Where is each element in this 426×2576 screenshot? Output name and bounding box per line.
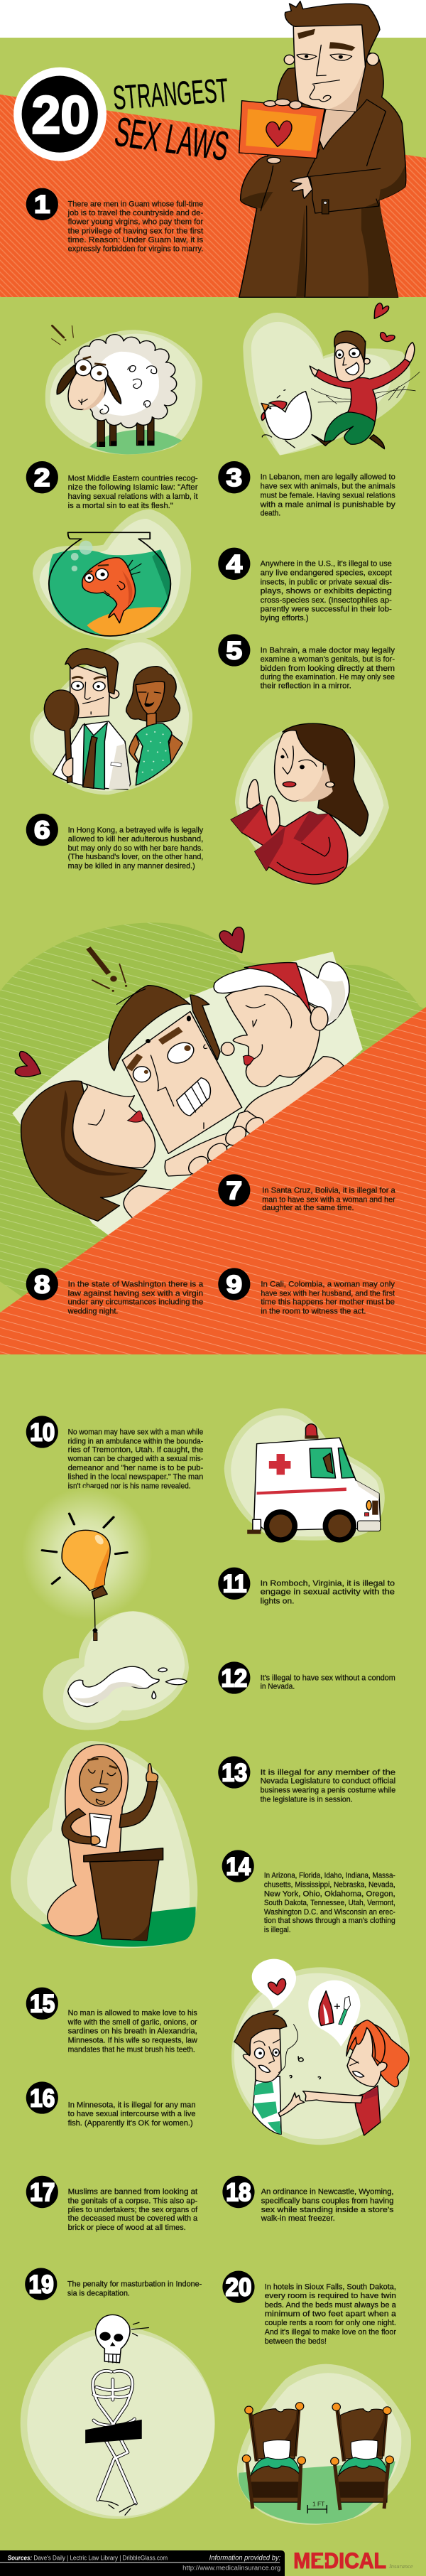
text: law 5: during the examination. He may only see xyxy=(261,672,395,681)
badge: 2: 2 xyxy=(34,464,50,492)
text: law 7: In Santa Cruz, Bolivia, it is illegal for a xyxy=(262,1185,395,1195)
illustration: angry wife xyxy=(231,723,389,884)
text: law 8: under any circumstances including the xyxy=(68,1297,204,1306)
text: law 1: the privilege of having sex for the first xyxy=(68,226,204,235)
text: law 15: wife with the smell of garlic, onions, or xyxy=(67,2017,197,2027)
censor bar xyxy=(85,2420,142,2443)
text: law 3: must be female. Having sexual relations xyxy=(261,490,395,500)
badge: 4 xyxy=(218,548,250,580)
badge: 5 xyxy=(218,634,250,667)
text: law 4: cross-species sex. (Insectophiles ap- xyxy=(261,596,392,605)
text: law 4: parently were successful in their lob- xyxy=(261,604,392,613)
badge: 13: 13 xyxy=(222,1759,247,1787)
badge: 11: 11 xyxy=(223,1570,246,1598)
text: law 4 xyxy=(261,559,392,623)
text: law 20: every room is required to have twin xyxy=(265,2292,396,2300)
badge: 15 xyxy=(26,1988,58,2020)
panel: laws 14 to 16 xyxy=(26,1850,410,2145)
text: law 13 xyxy=(261,1767,396,1804)
text: law 7: daughter at the same time. xyxy=(262,1203,354,1212)
panel: header: SEX LAWS xyxy=(111,109,232,170)
text: law 17: plies to undertakers; the sex organs of xyxy=(68,2206,198,2214)
text: law 8 xyxy=(67,1279,204,1315)
text: law 8: In the state of Washington there is a xyxy=(68,1279,204,1288)
text: law 11: lights on. xyxy=(261,1596,294,1605)
illustration: sheep xyxy=(45,330,202,454)
badge: 18: 18 xyxy=(226,2178,251,2206)
illustration: twin beds: 1 FT xyxy=(312,2501,324,2508)
icon: hearts above man xyxy=(374,303,395,342)
text: law 10: demeanor and "her name is to be pub- xyxy=(68,1463,203,1472)
panel: laws 2 to 4 xyxy=(26,303,420,640)
text: law 6: may be killed in any manner desired.) xyxy=(68,861,195,871)
badge: 7 xyxy=(218,1174,250,1207)
text: law 11: engage in sexual activity with the xyxy=(261,1587,395,1596)
text: law 10: riding in an ambulance within the bounda- xyxy=(68,1436,203,1445)
text: law 4: insects, in public or private sexual dis- xyxy=(261,577,392,586)
badge: 3: 3 xyxy=(226,464,242,492)
background: striped green heart xyxy=(0,922,426,1327)
text: law 18 xyxy=(261,2188,394,2223)
text: law 2 xyxy=(68,473,198,510)
logo: Medical Insurance: MEDICAL xyxy=(293,2548,386,2573)
callout: love speech bubble xyxy=(252,1959,296,2009)
illustration: twin beds xyxy=(237,2364,411,2525)
text: law 20: between the beds! xyxy=(265,2337,327,2346)
badge: 20 small: 20 xyxy=(226,2273,251,2301)
illustration: burst condom xyxy=(43,1597,189,1730)
title xyxy=(111,71,232,170)
badge: 4: 4 xyxy=(226,551,242,578)
text: law 6: (The husband's lover, on the other hand, xyxy=(68,852,203,861)
badge: 12: 12 xyxy=(221,1665,247,1693)
text: law 16 xyxy=(68,2100,196,2128)
text: law 5 xyxy=(261,645,395,690)
text: law 15 xyxy=(67,2008,197,2054)
text: law 16: In Minnesota, it is illegal for any man xyxy=(68,2100,196,2109)
text: law 1: There are men in Guam whose full-time xyxy=(68,199,204,208)
footer: url: http://www.medicalinsurance.org xyxy=(182,2565,280,2572)
illustration: couple with bad breath xyxy=(231,1967,410,2145)
badge: 19: 19 xyxy=(29,2270,54,2298)
callout: toothpaste and toothbrush speech bubble xyxy=(308,1980,360,2047)
text: law 14: tion that shows through a man's clothing xyxy=(264,1916,395,1925)
badge: 9: 9 xyxy=(226,1271,242,1299)
text: law 1: expressly forbidden for virgins to marry. xyxy=(68,244,203,253)
badge: 8 xyxy=(26,1268,58,1300)
text: law 12: It's illegal to have sex without a condom xyxy=(261,1673,395,1682)
badge: 15: 15 xyxy=(30,1990,55,2018)
text: law 14: chusetts, Mississippi, Nebraska, Nevada, xyxy=(264,1880,395,1889)
text: law 12 xyxy=(261,1673,395,1691)
text: law 7: man to have sex with a woman and her xyxy=(262,1195,395,1204)
text: law 6: In Hong Kong, a betrayed wife is legally xyxy=(68,825,203,834)
panel: laws 5 and 6 xyxy=(26,634,395,884)
text: law 19: The penalty for masturbation in Indone- xyxy=(67,2280,202,2288)
footer: credit: Information provided by: xyxy=(209,2555,280,2562)
text: law 7 xyxy=(262,1185,395,1212)
panel: laws 11 to 13 xyxy=(11,1487,396,1948)
text: law 13: Nevada Legislature to conduct official xyxy=(261,1776,395,1785)
text: law 17: the deceased must be covered with a xyxy=(68,2214,198,2223)
text: law 14 xyxy=(264,1870,395,1934)
badge: 2 xyxy=(26,461,58,493)
text: law 9: have sex with her husband, and the first xyxy=(261,1288,395,1298)
illustration: man chasing chicken xyxy=(243,313,420,456)
text: law 17: the genitals of a corpse. This also ap- xyxy=(68,2197,197,2205)
text: law 2: Most Middle Eastern countries recog- xyxy=(68,473,198,483)
text: law 4: plays, shows or exhibits depicting xyxy=(261,586,392,596)
badge: 6 xyxy=(26,814,58,846)
illustration: glowing light bulb xyxy=(22,1487,152,1620)
text: law 20 xyxy=(265,2283,397,2346)
text: law 5: bidden from looking directly at them xyxy=(261,664,395,673)
text: law 19: sia is decapitation. xyxy=(67,2290,130,2297)
text: law 5: In Bahrain, a male doctor may legally xyxy=(261,645,395,654)
text: law 13: business wearing a penis costume while xyxy=(261,1785,396,1794)
text: law 11 xyxy=(261,1578,395,1605)
text: law 3: have sex with animals, but the animals xyxy=(261,481,395,490)
text: law 20: minimum of two feet apart when a xyxy=(265,2310,397,2318)
text: law 15: Minnesota. If his wife so requests, law xyxy=(68,2035,197,2044)
badge: 10 xyxy=(26,1416,58,1448)
panel: laws 17 to 20 and footer xyxy=(0,2176,413,2576)
illustration: man in trench coat holding a card xyxy=(239,1,406,297)
text: law 10: No woman may have sex with a man while xyxy=(68,1427,204,1436)
text: law 9: In Cali, Colombia, a woman may only xyxy=(261,1279,395,1288)
illustration: goldfish in bowl xyxy=(33,510,191,640)
text: law 6: but may only do so with her bare hands. xyxy=(68,844,203,853)
badge: 5: 5 xyxy=(226,637,242,665)
badge: 16: 16 xyxy=(30,2085,55,2113)
badge: 1: 1 xyxy=(34,191,50,219)
panel: laws 7 to 9 xyxy=(0,922,426,1327)
text: law 8: wedding night. xyxy=(67,1306,118,1315)
text: law 5: their reflection in a mirror. xyxy=(261,681,351,690)
text: law 20: In hotels in Sioux Falls, South Dakota, xyxy=(265,2283,396,2291)
icon: hearts around man xyxy=(15,927,244,1077)
text: law 3: with a male animal is punishable by xyxy=(260,500,395,509)
text: law 18: specifically bans couples from having xyxy=(261,2197,393,2205)
badge: 3 xyxy=(218,461,250,493)
text: law 15: mandates that he must brush his teeth. xyxy=(68,2044,195,2054)
text: law 18: sex while standing inside a store's xyxy=(261,2206,394,2214)
text: law 1: job is to travel the countryside and de- xyxy=(67,208,203,217)
badge: 20 xyxy=(13,68,106,161)
badge: 11 xyxy=(218,1568,250,1600)
badge: 6: 6 xyxy=(34,817,50,844)
text: law 9: time this happens her mother must be xyxy=(261,1297,395,1306)
badge: 7: 7 xyxy=(226,1177,242,1205)
text: law 16: fish. (Apparently it's OK for women.) xyxy=(68,2118,193,2128)
text: law 17 xyxy=(68,2188,198,2232)
text: law 12: in Nevada. xyxy=(261,1681,295,1691)
text: law 1: time. Reason: Under Guam law, it is xyxy=(68,235,203,244)
text: law 3: In Lebanon, men are legally allowed to xyxy=(261,472,395,481)
illustration: ambulance xyxy=(224,1408,385,1543)
illustration: legislator in costume at podium xyxy=(11,1741,197,1948)
badge: 14: 14 xyxy=(226,1853,251,1881)
text: law 16: to have sexual intercourse with a live xyxy=(68,2109,196,2118)
text: law 11: In Romboch, Virginia, it is illegal to xyxy=(261,1578,395,1588)
text: law 17: brick or piece of wood at all times. xyxy=(68,2224,186,2232)
text: law 14: Washington D.C. and Wisconsin an erec- xyxy=(264,1907,395,1917)
text: law 15: No man is allowed to make love to his xyxy=(68,2008,197,2017)
text: law 1: flower young virgins, who pay them for xyxy=(68,217,203,226)
icon: exclamation marks near sheep xyxy=(52,325,73,345)
text: law 13: the legislature is in session. xyxy=(261,1794,353,1804)
badge: 17: 17 xyxy=(30,2178,55,2206)
footer: sources: Sources: Dave's Daily | Lectric Law Library | DribbleGlass.com xyxy=(8,2555,168,2562)
text: law 10: lished in the local newspaper." The man xyxy=(68,1472,203,1481)
logo: Medical Insurance: Insurance xyxy=(388,2563,413,2570)
icon: exclamation marks near man xyxy=(88,948,127,992)
text: law 15: sardines on his breath in Alexandria, xyxy=(68,2026,197,2035)
text: law 14: is illegal. xyxy=(264,1925,290,1934)
badge: 20: 20 xyxy=(31,85,89,145)
badge: 8: 8 xyxy=(34,1271,50,1299)
text: law 3: death. xyxy=(261,508,280,517)
text: law 2: nize the following Islamic law: "After xyxy=(68,483,198,492)
text: law 4: bying efforts.) xyxy=(261,613,309,623)
text: law 13: It is illegal for any member of the xyxy=(261,1767,396,1777)
text: law 3 xyxy=(260,472,395,517)
text: law 6 xyxy=(68,825,203,871)
badge: 1 xyxy=(26,188,58,220)
text: law 20: And it's illegal to make love on the floor xyxy=(265,2328,396,2337)
text: law 9 xyxy=(261,1279,395,1315)
text: law 18: walk-in meat freezer. xyxy=(261,2214,335,2223)
footer bar xyxy=(0,2550,285,2576)
text: law 17: Muslims are banned from looking at xyxy=(68,2188,198,2197)
badge: 14 xyxy=(222,1850,254,1882)
badge: 16 xyxy=(26,2081,58,2114)
badge: 9 xyxy=(218,1268,250,1300)
text: law 20: beds. And the beds must always be a xyxy=(265,2301,397,2310)
text: law 10: woman can be charged with a sexual mis- xyxy=(67,1454,203,1463)
illustration: headless skeleton xyxy=(21,2314,215,2519)
text: law 14: New York, Ohio, Oklahoma, Oregon, xyxy=(264,1889,395,1898)
text: law 4: any live endangered species, except xyxy=(261,568,392,577)
text: law 10: ries of Tremonton, Utah. If caught, the xyxy=(68,1445,204,1454)
text: law 8: law against having sex with a virgin xyxy=(68,1288,203,1298)
text: law 2: is a mortal sin to eat its flesh." xyxy=(68,501,173,510)
illustration: man between mother and daughter xyxy=(12,952,363,1256)
text: law 10 xyxy=(67,1427,204,1490)
text: law 9: in the room to witness the act. xyxy=(261,1306,366,1315)
text: law 1 xyxy=(67,199,204,253)
text: law 6: allowed to kill her adulterous husband, xyxy=(68,834,203,844)
illustration: doctor with mirror and patient xyxy=(30,637,192,794)
text: law 20: couple rents a room for only one night. xyxy=(265,2319,396,2327)
text: law 18: An ordinance in Newcastle, Wyoming, xyxy=(261,2188,393,2197)
panel: header xyxy=(13,1,406,297)
badge: 10: 10 xyxy=(30,1419,55,1447)
text: law 2: having sexual relations with a lamb, it xyxy=(68,492,198,501)
text: law 4: Anywhere in the U.S., it's illegal to use xyxy=(261,559,392,568)
text: law 19 xyxy=(67,2280,202,2297)
title: STRANGEST xyxy=(111,71,230,117)
panel: orange striped header wedge xyxy=(0,95,426,297)
text: law 5: examine a woman's genitals, but is for- xyxy=(261,654,395,664)
text: law 10: isn't charged nor is his name revealed. xyxy=(68,1481,191,1490)
panel: orange striped wedge xyxy=(0,1007,426,1354)
